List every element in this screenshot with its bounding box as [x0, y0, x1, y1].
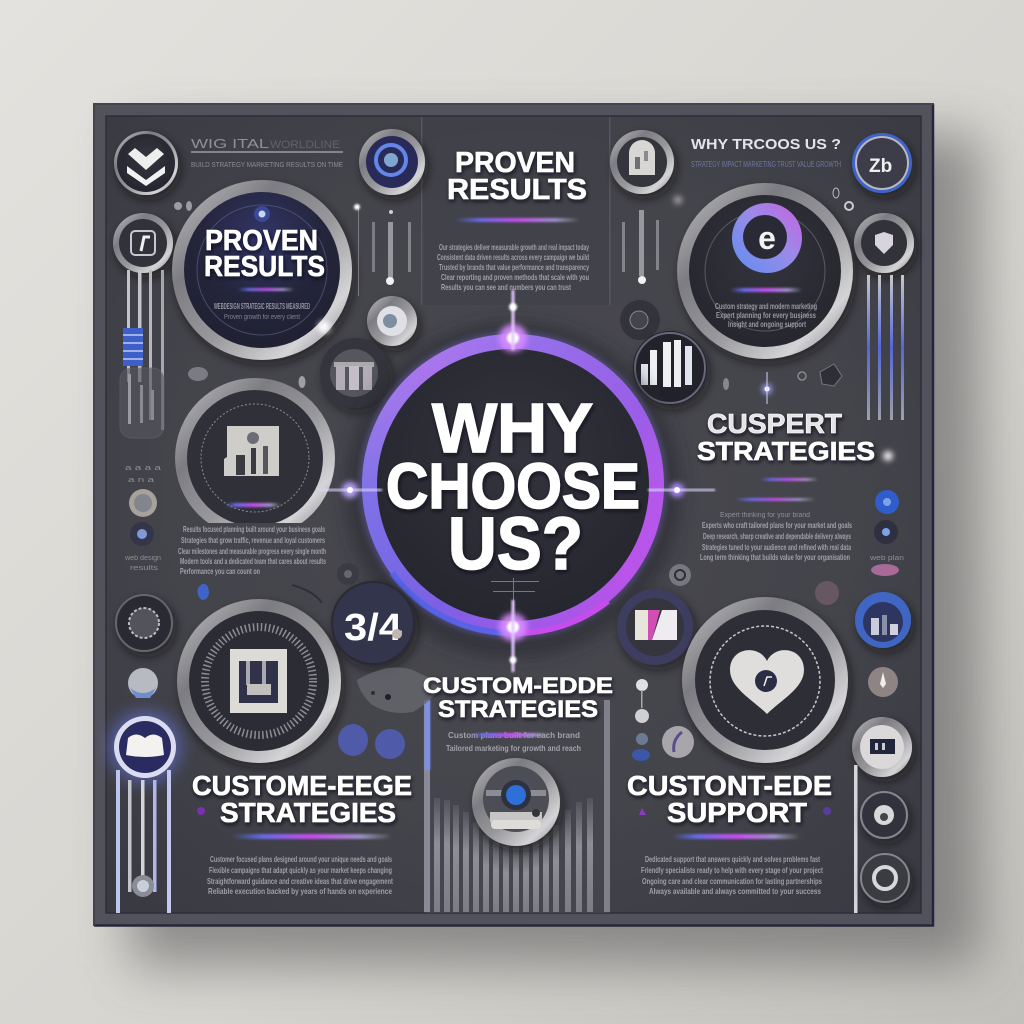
icon: swirl badge [861, 854, 909, 902]
text block: right mid [700, 512, 852, 562]
icon: chevron badge [114, 131, 178, 195]
icon: gradient e ring [732, 203, 802, 273]
bar chart: bottom center column stripes [434, 798, 593, 912]
text block: bottom left: Straightforward guidance and creative ideas that drive engagement [207, 876, 393, 886]
text block: bottom right: Ongoing care and clear communication for lasting partnerships [642, 876, 822, 886]
small items left mid: a n a [128, 477, 154, 484]
icon: blue lens top left [359, 129, 425, 195]
text block: top center [437, 242, 589, 292]
right mid heading: STRATEGIES [697, 436, 875, 466]
icon: bar chart badge [320, 338, 390, 408]
icon: shield badge [854, 213, 914, 273]
icon: bottom center dial [472, 758, 560, 846]
text block: left mid: Performance you can count on [180, 566, 260, 576]
left top header: BUILD STRATEGY MARKETING RESULTS ON TIME [191, 162, 343, 169]
panel: proven results circle: WEBDESIGN STRATEGIC RESULTS MEASURED [214, 301, 310, 311]
icon: dotted column top left [358, 206, 411, 296]
heading: custom edge support: SUPPORT [667, 797, 807, 828]
text block: bottom left [207, 854, 393, 896]
panel: top right circle: Custom strategy and modern marketing [715, 301, 817, 311]
top center heading: PROVEN [455, 147, 575, 179]
right lower line [854, 765, 858, 913]
text block: left mid: Clear milestones and measurable progress every single month [178, 546, 326, 556]
panel: left chart circle [175, 378, 335, 538]
top center heading: RESULTS [447, 174, 587, 206]
icon: silver drop [868, 667, 898, 697]
badge: fraction 3/4 [332, 582, 414, 664]
text block: top center: Results you can see and numbers you can trust [441, 282, 571, 292]
right top header [691, 136, 841, 169]
icon: document badge [113, 213, 173, 273]
main panel [94, 104, 934, 926]
heading: customer edge strategies: CUSTOME-EEGE [192, 770, 412, 801]
text block: left mid: Modern tools and a dedicated team that cares about results [180, 556, 326, 566]
heading: customer edge strategies: STRATEGIES [220, 797, 396, 828]
text block: bottom right: Dedicated support that answers quickly and solves problems fast [645, 854, 820, 864]
icon: heart badge left [109, 711, 181, 783]
right top header: STRATEGY IMPACT MARKETING TRUST VALUE GROWTH [691, 160, 841, 169]
small items right mid [869, 490, 904, 576]
small items left mid [124, 465, 161, 572]
badge: fraction 3/4: 3/4 [344, 607, 402, 649]
icon: blue bag badge [855, 592, 911, 648]
text block: bottom right [641, 854, 823, 896]
small items center right lower [632, 564, 839, 761]
text block: bottom left: Reliable execution backed by years of hands on experience [208, 886, 392, 896]
bottom center heading: STRATEGIES [438, 696, 598, 723]
icon: silver gem [128, 668, 158, 698]
icon: framed box [230, 649, 287, 713]
icon: gray bump [357, 668, 445, 713]
left top header: WIG ITAL [191, 136, 269, 151]
right slider lines [867, 275, 904, 420]
icon: building chart [224, 426, 279, 476]
text block: top center: Our strategies deliver measurable growth and real impact today [439, 242, 589, 252]
panel: proven results circle: PROVEN [205, 225, 318, 257]
icon: silver knob [367, 296, 417, 346]
text block: top center: Consistent data driven results across every campaign we build [437, 252, 589, 262]
icon: silver document badge [610, 130, 674, 194]
left top header: WORLDLINE [270, 139, 340, 151]
panel: top right circle: Insight and ongoing support [728, 319, 806, 329]
text block: right mid: Deep research, sharp creative and dependable delivery always [703, 531, 851, 541]
right top header: WHY TRCOOS US ? [691, 136, 841, 153]
text block: top center: Clear reporting and proven methods that scale with you [441, 272, 589, 282]
icon: brain badge [116, 595, 172, 651]
icon: small lens [254, 206, 270, 222]
panel: top right circle: Expert planning for every business [716, 310, 816, 320]
bottom center heading: CUSTOM-EDDE [423, 673, 613, 698]
bottom center heading [423, 673, 613, 753]
text block: left mid: Results focused planning built around your business goals [183, 524, 325, 534]
right mid heading: CUSPERT [707, 408, 842, 439]
heading: customer edge strategies [192, 770, 412, 839]
panel: top center column [421, 117, 610, 305]
icon: dim knob [620, 300, 660, 340]
top center heading [447, 147, 587, 222]
text block: bottom right: Always available and always committed to your success [649, 886, 821, 896]
title [386, 389, 640, 585]
title: CHOOSE [386, 450, 640, 522]
icon: gradient e ring: e [758, 220, 776, 256]
panel: proven results circle: RESULTS [204, 251, 325, 283]
small items left mid: a a a a [125, 465, 161, 472]
bottom left lines [116, 770, 171, 913]
title: WHY [432, 389, 593, 467]
text block: bottom right: Friendly specialists ready to help with every stage of your project [641, 865, 823, 875]
tick marks under title [491, 578, 539, 612]
bottom center heading: Tailored marketing for growth and reach [446, 743, 581, 753]
text block: right mid: Long term thinking that builds value for your organisation [700, 552, 850, 562]
text block: bottom left: Customer focused plans designed around your unique needs and goals [210, 854, 392, 864]
panel shadow [130, 135, 980, 965]
icon: blue outlined badge: Zb [869, 156, 892, 177]
icon: flame badge [861, 792, 907, 838]
text block: left mid [178, 524, 326, 576]
panel: top right circle [677, 183, 853, 359]
title: US? [448, 502, 583, 585]
small decorative icons right [723, 188, 853, 390]
left top header [191, 136, 343, 169]
text block: right mid: Experts who craft tailored plans for your market and goals [702, 520, 852, 530]
central circle [345, 322, 681, 658]
icon: chat badge [852, 717, 912, 777]
text block: right mid: Strategies tuned to your audience and refined with real data [702, 542, 851, 552]
small items right mid: web plan [869, 555, 904, 562]
icon: white bars badge [633, 331, 707, 405]
heading: custom edge support: CUSTONT-EDE [627, 770, 832, 801]
small items left lower [198, 563, 359, 603]
small decorative icons left [174, 201, 306, 388]
panel: heart circle [682, 597, 848, 763]
bottom center heading: Custom plans built for each brand [448, 730, 580, 740]
icon: heart [730, 650, 804, 714]
text block: right mid: Expert thinking for your brand [720, 512, 810, 519]
right mid highlight lines [735, 478, 818, 501]
small items left mid: results [130, 565, 159, 572]
panel: proven results circle [172, 180, 352, 360]
panel: bottom center column [424, 695, 610, 913]
text block: left mid: Strategies that grow traffic, revenue and loyal customers [181, 535, 325, 545]
icon: J/I badge [617, 589, 693, 665]
heading: custom edge support [627, 770, 832, 839]
icons: blue blobs [338, 724, 405, 759]
left slider lines [120, 270, 164, 438]
right mid heading [697, 408, 875, 466]
glow stars around central circle [318, 196, 893, 672]
panel: proven results circle: Proven growth for every client [224, 314, 300, 321]
small items left mid: web design [124, 555, 161, 562]
panel: bottom left circle [177, 599, 341, 763]
text block: bottom left: Flexible campaigns that adapt quickly as your market keeps changing [209, 865, 392, 875]
icon: dotted column top right [622, 210, 659, 284]
text block: top center: Trusted by brands that value performance and transparency [439, 262, 589, 272]
icon: blue outlined badge [852, 133, 912, 193]
